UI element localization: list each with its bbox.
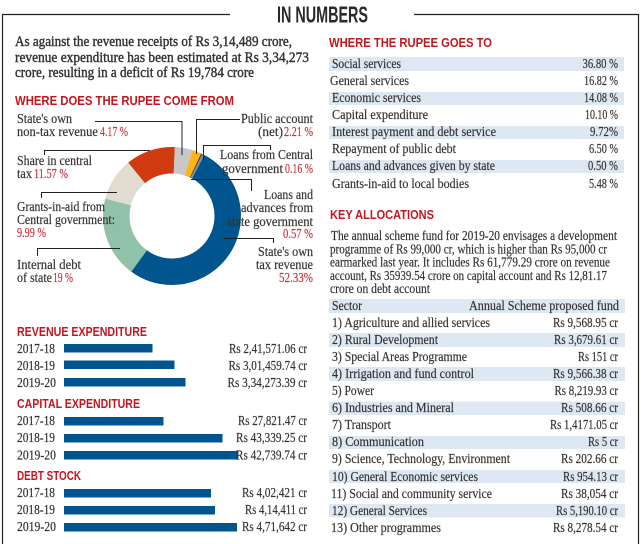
row 3: Rs 151 cr — [578, 349, 618, 364]
row: capital expenditure: 10.10 % — [585, 107, 618, 122]
row: capital expenditure: Capital expenditure — [332, 107, 428, 122]
bar row 2017-18: 2017-18 — [17, 413, 55, 428]
row 8: Rs 5 cr — [588, 434, 618, 449]
bar row 2019-20: Rs 3,34,273.39 cr — [228, 375, 307, 390]
row: grants-in-aid to local bodies: Grants-in-aid to local bodies — [332, 176, 469, 191]
row 1: Rs 9,568.95 cr — [553, 315, 618, 330]
bar row 2018-19 — [17, 502, 307, 517]
row: repayment of public debt: Repayment of public debt — [332, 141, 456, 156]
row 10: Rs 954.13 cr — [563, 469, 618, 484]
row 4 — [332, 366, 618, 382]
label: grants-in-aid — [17, 199, 115, 240]
label: loans from central government — [220, 147, 313, 176]
row: repayment of public debt: 6.50 % — [589, 141, 618, 156]
row: economic services — [332, 90, 618, 105]
row: social services — [332, 56, 618, 71]
paragraph: crore on debt account — [330, 281, 430, 296]
label: state's own tax revenue — [256, 244, 313, 285]
bar row 2018-19: 2018-19 — [17, 430, 55, 445]
row 13: Rs 8,278.54 cr — [553, 520, 618, 535]
bar row 2018-19 — [17, 358, 307, 373]
table header: Sector — [332, 298, 362, 313]
bar row 2017-18: 2017-18 — [17, 341, 55, 356]
row: loans and advances — [332, 158, 618, 173]
bar row 2019-20: 2019-20 — [17, 519, 56, 534]
bar row 2019-20 — [17, 519, 307, 534]
label: public account: Public account — [241, 111, 313, 126]
row: social services: 36.80 % — [582, 56, 618, 71]
bar row 2017-18 — [17, 341, 307, 356]
label: state's own tax revenue: State's own — [258, 244, 313, 259]
row 2: 2) Rural Development — [332, 332, 438, 348]
heading: capital expenditure: CAPITAL EXPENDITURE — [17, 397, 140, 411]
row 13 — [331, 520, 618, 536]
row 3: 3) Special Areas Programme — [332, 349, 467, 365]
row 3 — [332, 349, 618, 365]
row 10: 10) General Economic services — [332, 469, 478, 485]
bar row 2018-19: 2018-19 — [17, 358, 55, 373]
row 7 — [332, 417, 618, 433]
bar row 2018-19 — [17, 430, 307, 445]
heading: key allocations: KEY ALLOCATIONS — [330, 208, 434, 222]
row 1: 1) Agriculture and allied services — [332, 315, 490, 331]
row 8 — [332, 434, 618, 450]
label: public account — [241, 111, 313, 140]
label: internal debt of state: Internal debt — [17, 257, 81, 272]
panel: key allocations — [329, 208, 625, 536]
row: capital expenditure — [332, 107, 618, 122]
row 12: Rs 5,190.10 cr — [556, 503, 618, 518]
intro text block — [15, 34, 309, 81]
row: loans and advances: Loans and advances given by state — [332, 158, 495, 173]
label: state's own non-tax revenue: non-tax revenue — [17, 124, 98, 139]
row 6: Rs 508.66 cr — [561, 400, 618, 415]
row 7: Rs 1,4171.05 cr — [550, 417, 618, 432]
label: internal debt of state — [17, 257, 81, 285]
label: state's own tax revenue: tax revenue — [256, 257, 313, 272]
row 9: Rs 202.66 cr — [561, 451, 618, 466]
panel: debt stock — [17, 469, 307, 534]
label: share in central tax: tax — [17, 166, 32, 181]
bar row 2018-19: Rs 43,339.25 cr — [236, 430, 307, 445]
row 9: 9) Science, Technology, Environment — [332, 451, 510, 467]
heading: debt stock: DEBT STOCK — [17, 469, 81, 483]
label: state's own non-tax revenue: 4.17 % — [100, 124, 128, 139]
leader lines — [38, 120, 274, 256]
row 5: 5) Power — [332, 383, 374, 399]
row 11: Rs 38,054 cr — [561, 486, 618, 501]
label: loans and advances: state government — [227, 214, 313, 229]
heading: revenue expenditure: REVENUE EXPENDITURE — [17, 325, 147, 339]
label: loans and advances — [227, 187, 313, 241]
bar row 2019-20: Rs 42,739.74 cr — [236, 448, 307, 462]
label: loans and advances: Loans and — [264, 187, 313, 202]
row: economic services: 14.08 % — [584, 90, 618, 105]
row 8: 8) Communication — [332, 434, 424, 450]
label: loans and advances: 0.57 % — [283, 226, 313, 241]
label: internal debt of state: of state — [17, 270, 52, 285]
row 6: 6) Industries and Mineral — [332, 400, 454, 416]
bar row 2019-20: 2019-20 — [17, 375, 56, 390]
table header: Annual Scheme proposed fund — [469, 298, 619, 313]
row: loans and advances: 0.50 % — [588, 158, 618, 173]
panel: donut chart with labels — [17, 111, 313, 285]
row: repayment of public debt — [332, 141, 618, 156]
bar row 2019-20: Rs 4,71,642 cr — [242, 519, 307, 534]
row: economic services: Economic services — [332, 90, 421, 105]
label: state's own non-tax revenue: State's own — [17, 111, 72, 126]
bar row 2017-18 — [17, 413, 307, 428]
row 12: 12) General Services — [332, 503, 427, 519]
intro text block: revenue expenditure has been estimated at Rs 3,34,273 — [15, 50, 309, 66]
label: loans from central government: government — [222, 161, 283, 176]
label: state's own non-tax revenue — [17, 111, 128, 139]
bar row 2017-18: Rs 27,821.47 cr — [238, 413, 307, 428]
bar row 2017-18: 2017-18 — [17, 485, 55, 500]
row: interest payment: 9.72% — [590, 124, 618, 139]
row 4: Rs 9,566.38 cr — [553, 366, 618, 381]
label: share in central tax: 11.57 % — [34, 166, 68, 181]
label: share in central tax: Share in central — [17, 153, 92, 168]
row 1 — [332, 315, 618, 331]
paragraph — [330, 228, 617, 296]
label: grants-in-aid: 9.99 % — [17, 225, 46, 240]
row 5 — [332, 383, 618, 399]
bar row 2018-19: Rs 3,01,459.74 cr — [228, 358, 307, 373]
label: public account: 2.21 % — [284, 124, 313, 139]
bar row 2019-20 — [17, 448, 307, 462]
table bands — [329, 299, 625, 518]
label: loans from central government: Loans from Central — [220, 147, 313, 162]
heading: where the rupee goes to: WHERE THE RUPEE GOES TO — [329, 36, 492, 50]
bar row 2018-19: Rs 4,14,411 cr — [245, 502, 307, 517]
row 12 — [332, 503, 618, 519]
label: public account: (net) — [258, 124, 283, 140]
row 5: Rs 8,219.93 cr — [554, 383, 618, 398]
row 7: 7) Transport — [332, 417, 391, 433]
table bands — [329, 57, 624, 173]
row 6 — [332, 400, 618, 416]
row 2: Rs 3,679.61 cr — [554, 332, 618, 347]
intro text block: crore, resulting in a deficit of Rs 19,784 crore — [15, 65, 254, 81]
donut chart — [116, 160, 228, 272]
bar row 2019-20: 2019-20 — [17, 448, 56, 462]
label: grants-in-aid: Grants-in-aid from — [17, 199, 105, 214]
row: grants-in-aid to local bodies: 5.48 % — [589, 176, 618, 191]
table header — [332, 298, 619, 313]
row: grants-in-aid to local bodies — [332, 176, 618, 191]
row: general services: General services — [330, 73, 409, 88]
label: state's own tax revenue: 52.33% — [279, 270, 313, 285]
panel: capital expenditure — [17, 397, 307, 462]
row: interest payment — [332, 124, 618, 139]
label: loans from central government: 0.16 % — [285, 161, 313, 176]
row 11 — [331, 486, 618, 502]
row 10 — [332, 469, 618, 485]
bar row 2017-18 — [17, 485, 307, 500]
row 9 — [332, 451, 618, 467]
heading: where does the rupee come from: WHERE DOES THE RUPEE COME FROM — [15, 94, 234, 108]
title: IN NUMBERS — [277, 2, 368, 28]
label: share in central tax — [17, 153, 92, 181]
label: internal debt of state: 19 % — [53, 270, 73, 285]
row 2 — [332, 332, 618, 348]
bar row 2017-18: Rs 2,41,571.06 cr — [229, 341, 307, 356]
label: loans and advances: advances from — [241, 200, 313, 215]
panel: where the rupee goes to — [329, 36, 624, 191]
bar row 2018-19: 2018-19 — [17, 502, 55, 517]
label: grants-in-aid: Central government: — [17, 212, 115, 227]
panel: revenue expenditure — [17, 325, 307, 390]
row 11: 11) Social and community service — [331, 486, 492, 502]
row: interest payment: Interest payment and debt service — [332, 124, 496, 139]
bar row 2019-20 — [17, 375, 307, 390]
row 4: 4) Irrigation and fund control — [332, 366, 474, 382]
intro text block: As against the revenue receipts of Rs 3,14,489 crore, — [15, 34, 292, 50]
row 13: 13) Other programmes — [331, 520, 441, 536]
row: social services: Social services — [332, 56, 401, 71]
row: general services — [330, 73, 618, 88]
row: general services: 16.82 % — [584, 73, 618, 88]
bar row 2017-18: Rs 4,02,421 cr — [242, 485, 307, 500]
